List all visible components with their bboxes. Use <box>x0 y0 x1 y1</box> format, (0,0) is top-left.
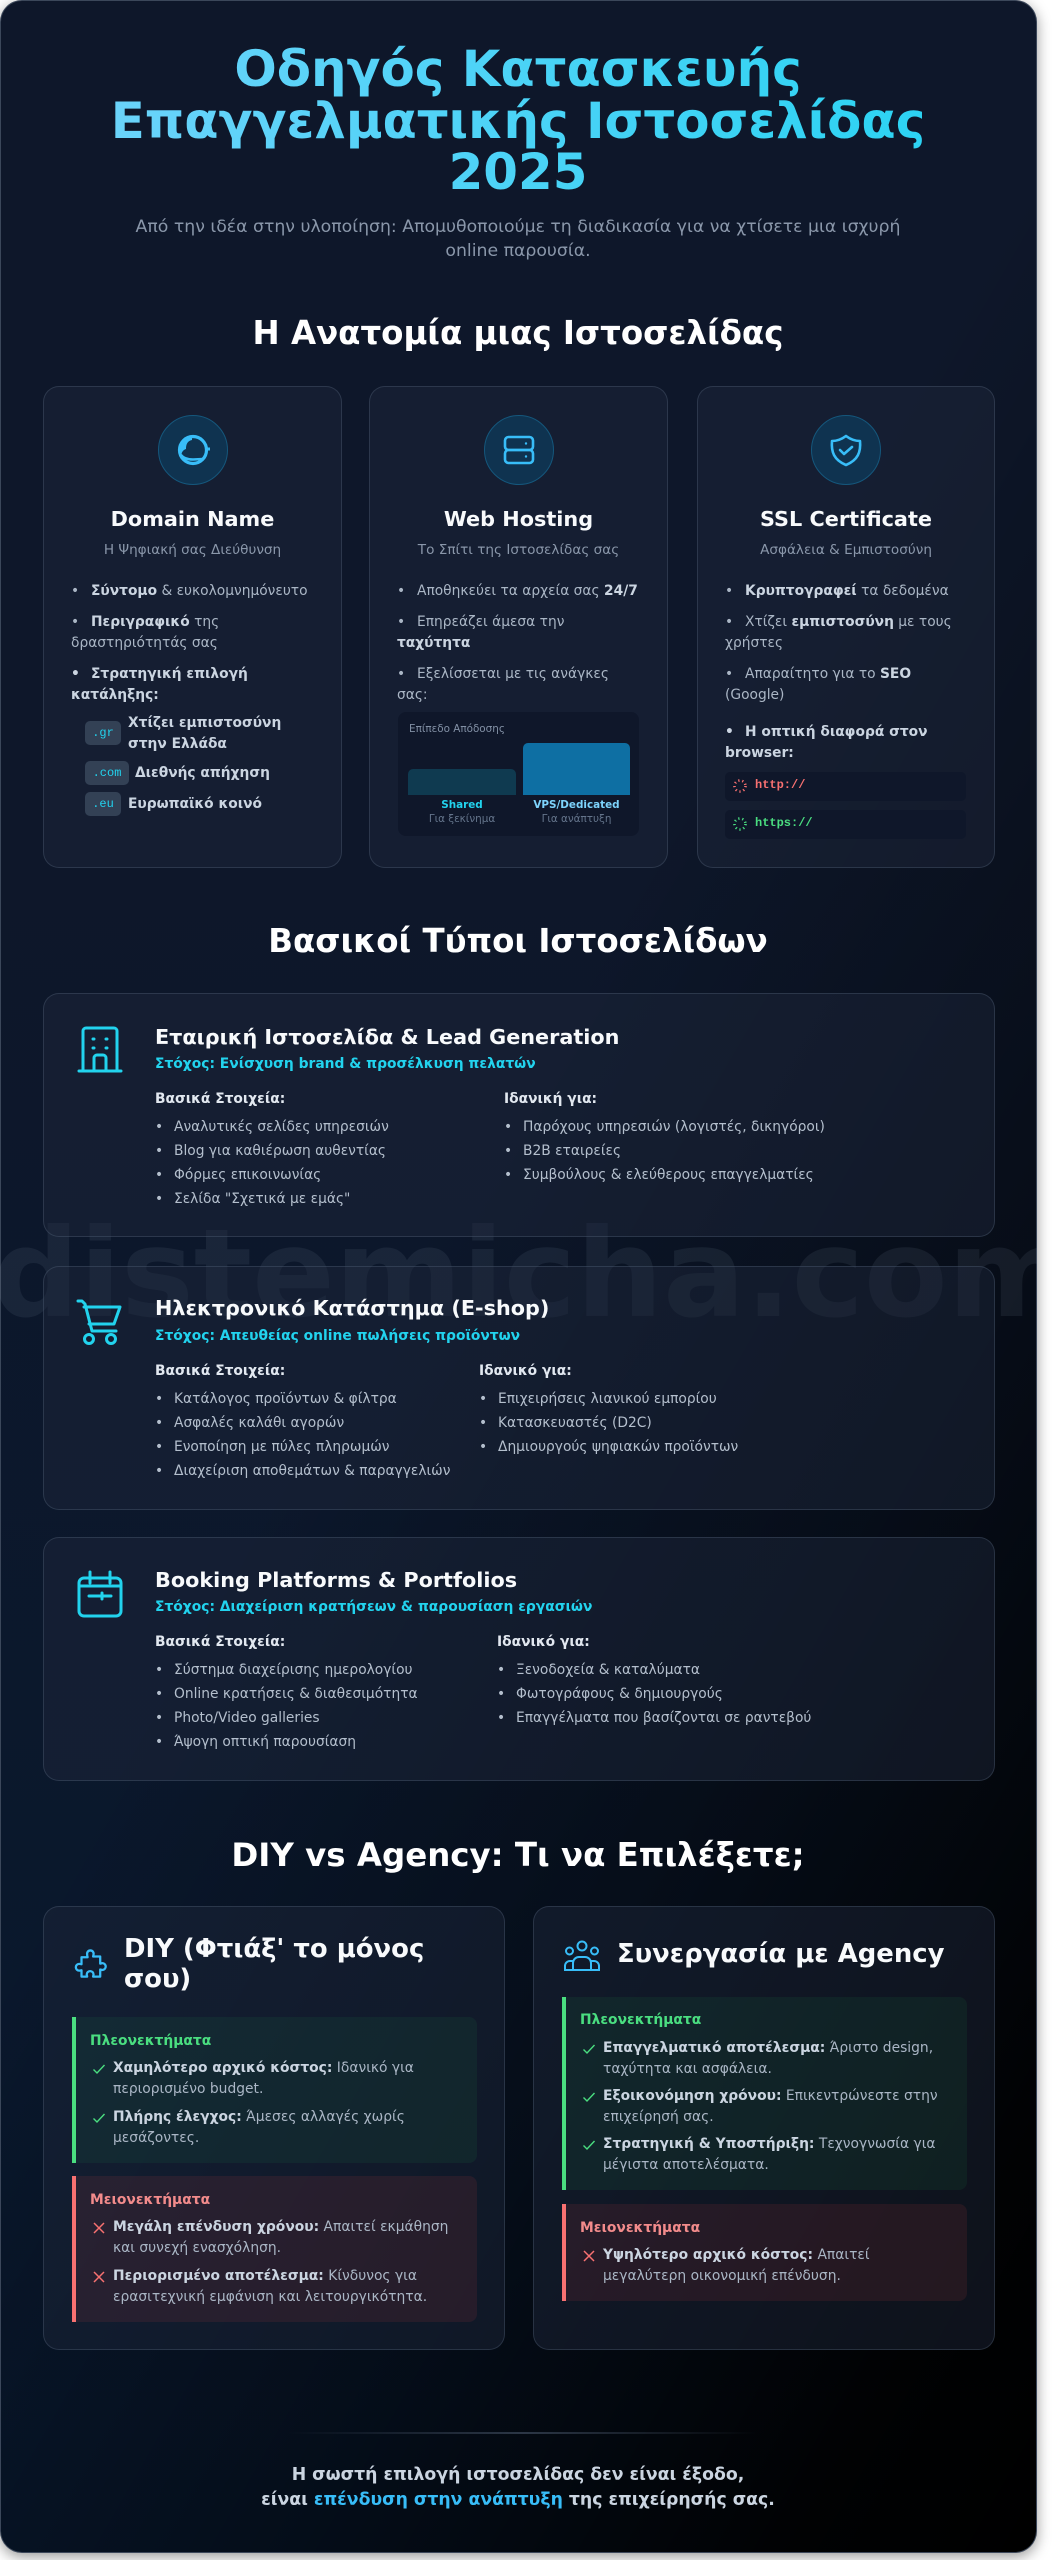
check icon <box>583 2140 595 2150</box>
column: ideal for: • <box>479 1391 487 1407</box>
type goal: Στόχος: Ενίσχυση brand & προσέλκυση πελατών <box>155 1056 536 1072</box>
list item: επιχείρησή σας. <box>603 2109 714 2125</box>
column: key elements: • <box>155 1119 163 1135</box>
card title: Web Hosting <box>444 507 593 531</box>
check icon <box>93 2064 105 2074</box>
column: ideal for: • <box>497 1662 505 1678</box>
column: ideal for: • <box>497 1710 505 1726</box>
list item: και συνεχή ενασχόληση. <box>113 2240 281 2256</box>
column: ideal for <box>479 1363 738 1455</box>
panel: advantages <box>72 2017 477 2163</box>
column: key elements <box>155 1634 418 1750</box>
list item <box>603 2088 938 2125</box>
check icon <box>583 2092 595 2102</box>
column: ideal for: Ξενοδοχεία & καταλύματα <box>516 1662 700 1678</box>
http row <box>725 772 966 801</box>
panel: ssl certificate: • <box>725 666 733 682</box>
column: ideal for: • <box>479 1415 487 1431</box>
list item: Επαγγελματικό αποτέλεσμα: Άριστο design, <box>603 2040 933 2056</box>
panel: domain name: Χτίζει εμπιστοσύνη <box>128 715 281 731</box>
column: ideal for: Παρόχους υπηρεσιών (λογιστές, δικηγόροι) <box>523 1119 825 1135</box>
list item: ερασιτεχνική εμφάνιση και λειτουργικότητα. <box>113 2289 427 2305</box>
icon: puzzle <box>74 1949 107 1978</box>
footer text: Η σωστή επιλογή ιστοσελίδας δεν είναι έξοδο, <box>292 2465 744 2485</box>
column title: σου) <box>124 1964 191 1994</box>
tld .gr <box>85 721 121 745</box>
label: Πλεονεκτήματα <box>90 2033 211 2049</box>
icon: users <box>564 1940 600 1971</box>
column: ideal for: Ιδανική για: <box>504 1091 597 1107</box>
heading: website types: Βασικοί Τύποι Ιστοσελίδων <box>268 922 768 960</box>
column: ideal for: Κατασκευαστές (D2C) <box>498 1415 652 1431</box>
cross icon <box>94 2222 104 2234</box>
type title: Booking Platforms & Portfolios <box>155 1568 517 1592</box>
panel: web hosting: σας: <box>397 687 428 703</box>
column: ideal for: • <box>504 1119 512 1135</box>
check icon <box>583 2044 595 2054</box>
title: Οδηγός Κατασκευής <box>234 40 802 98</box>
panel: domain name: Περιγραφικό της <box>91 614 219 630</box>
column: key elements: Online κρατήσεις & διαθεσιμότητα <box>174 1686 418 1702</box>
card subtitle: Η Ψηφιακή σας Διεύθυνση <box>104 542 281 558</box>
column: ideal for: Φωτογράφους & δημιουργούς <box>516 1686 723 1702</box>
panel: domain name: στην Ελλάδα <box>128 736 227 752</box>
column: key elements: • <box>155 1710 163 1726</box>
column: ideal for: Συμβούλους & ελεύθερους επαγγελματίες <box>523 1167 814 1183</box>
type goal: Στόχος: Διαχείριση κρατήσεων & παρουσίαση εργασιών <box>155 1599 592 1615</box>
list item: μεγαλύτερη οικονομική επένδυση. <box>603 2268 841 2284</box>
panel: domain name <box>43 386 342 868</box>
bullet list: Κρυπτογραφεί τα δεδομένα <box>745 583 949 599</box>
list item: Χαμηλότερο αρχικό κόστος: Ιδανικό για <box>113 2060 414 2076</box>
panel: agency <box>533 1906 995 2350</box>
panel: web hosting <box>369 386 668 868</box>
column: key elements: • <box>155 1686 163 1702</box>
column: key elements: Διαχείριση αποθεμάτων & παραγγελιών <box>174 1463 450 1479</box>
column: key elements: Φόρμες επικοινωνίας <box>174 1167 321 1183</box>
tld .eu <box>85 792 121 816</box>
column: ideal for <box>504 1091 825 1183</box>
list item <box>113 2109 405 2146</box>
tld .com <box>85 761 129 785</box>
column: ideal for: Ιδανικό για: <box>497 1634 590 1650</box>
column: key elements: • <box>155 1439 163 1455</box>
column title <box>124 1934 424 1994</box>
column: key elements: • <box>155 1143 163 1159</box>
label: Μειονεκτήματα <box>580 2220 700 2236</box>
https row <box>725 810 966 839</box>
panel: disadvantages <box>562 2204 967 2301</box>
list item: περιορισμένο budget. <box>113 2081 263 2097</box>
column: key elements: • <box>155 1734 163 1750</box>
subtitle <box>136 217 900 260</box>
column: ideal for: • <box>504 1143 512 1159</box>
https row: https:// <box>755 816 813 830</box>
panel: ssl certificate: browser: <box>725 745 794 761</box>
column: ideal for: B2B εταιρείες <box>523 1143 621 1159</box>
bullet list: • <box>725 583 733 599</box>
footer text <box>261 2465 775 2510</box>
panel: disadvantages <box>72 2176 477 2322</box>
column: key elements: Βασικά Στοιχεία: <box>155 1091 285 1107</box>
panel: ssl certificate <box>697 386 995 868</box>
column: key elements: • <box>155 1415 163 1431</box>
panel: web hosting: Επηρεάζει άμεσα την <box>417 614 564 630</box>
panel: ssl certificate: • <box>725 614 733 630</box>
tld .eu: .eu <box>92 797 114 811</box>
icon: calendar <box>78 1570 122 1618</box>
type title: Εταιρική Ιστοσελίδα & Lead Generation <box>155 1025 619 1049</box>
panel: web hosting: • <box>397 614 405 630</box>
panel: domain name: • <box>71 666 80 682</box>
column: key elements: • <box>155 1662 163 1678</box>
column: key elements <box>155 1091 389 1207</box>
panel: domain name: • <box>71 614 79 630</box>
column: key elements: Σύστημα διαχείρισης ημερολογίου <box>174 1662 412 1678</box>
column: key elements: • <box>155 1191 163 1207</box>
panel: domain name: Ευρωπαϊκό κοινό <box>128 796 262 812</box>
label: Πλεονεκτήματα <box>580 2012 701 2028</box>
column: key elements: • <box>155 1463 163 1479</box>
panel: web hosting: • <box>397 666 405 682</box>
column: ideal for <box>497 1634 811 1726</box>
column: key elements: Ενοποίηση με πύλες πληρωμών <box>174 1439 389 1455</box>
list item <box>603 2040 933 2077</box>
icon: cart <box>76 1300 122 1345</box>
bar label: vps: VPS/Dedicated <box>533 799 620 811</box>
column: ideal for: Επαγγέλματα που βασίζονται σε ραντεβού <box>516 1710 811 1726</box>
panel: ssl certificate: χρήστες <box>725 635 783 651</box>
http row: http:// <box>755 778 805 792</box>
label: Μειονεκτήματα <box>90 2192 210 2208</box>
icon: shield <box>811 415 881 485</box>
panel: web hosting: ταχύτητα <box>397 635 470 651</box>
tld .gr: .gr <box>92 726 114 740</box>
column: key elements: Κατάλογος προϊόντων & φίλτρα <box>174 1391 397 1407</box>
list item: Πλήρης έλεγχος: Άμεσες αλλαγές χωρίς <box>113 2109 405 2125</box>
bullet list: • <box>397 583 405 599</box>
list item <box>602 2247 870 2284</box>
panel: domain name: κατάληξης: <box>71 687 159 703</box>
list item: Υψηλότερο αρχικό κόστος: Απαιτεί <box>603 2247 870 2263</box>
panel: web hosting: Εξελίσσεται με τις ανάγκες <box>417 666 609 682</box>
column: ideal for: Δημιουργούς ψηφιακών προϊόντων <box>498 1439 738 1455</box>
column: key elements: Βασικά Στοιχεία: <box>155 1634 285 1650</box>
card title: SSL Certificate <box>760 507 932 531</box>
column: key elements: • <box>155 1391 163 1407</box>
panel: e-shop <box>43 1266 995 1510</box>
column: key elements: Blog για καθιέρωση αυθεντίας <box>174 1143 386 1159</box>
subtitle: online παρουσία. <box>445 240 591 260</box>
heading: anatomy: Η Ανατομία μιας Ιστοσελίδας <box>253 314 783 352</box>
column title: DIY (Φτιάξ' το μόνος <box>124 1934 424 1964</box>
icon: globe <box>158 415 228 485</box>
title: 2025 <box>449 143 587 201</box>
list item: μεσάζοντες. <box>113 2130 199 2146</box>
chart: performance level: Για ανάπτυξη <box>542 813 611 825</box>
panel: ssl certificate: Η οπτική διαφορά στον <box>745 724 928 740</box>
bar: shared <box>408 769 516 795</box>
column: key elements <box>155 1363 450 1479</box>
bullet list: Αποθηκεύει τα αρχεία σας 24/7 <box>417 583 638 599</box>
heading: diy vs agency: DIY vs Agency: Τι να Επιλέξετε; <box>231 1836 805 1874</box>
panel: ssl certificate: • <box>725 724 734 740</box>
column: ideal for: • <box>479 1439 487 1455</box>
bar label: shared: Shared <box>441 799 483 811</box>
footer text: είναι επένδυση στην ανάπτυξη της επιχείρησής σας. <box>261 2490 775 2510</box>
bar: vps <box>523 743 630 795</box>
list item: μέγιστα αποτελέσματα. <box>603 2157 769 2173</box>
column: key elements: Σελίδα "Σχετικά με εμάς" <box>174 1191 350 1207</box>
column: key elements: Ασφαλές καλάθι αγορών <box>174 1415 344 1431</box>
column: key elements: • <box>155 1167 163 1183</box>
column: ideal for: • <box>504 1167 512 1183</box>
column title: Συνεργασία με Agency <box>617 1939 944 1969</box>
panel: domain name: Διεθνής απήχηση <box>135 765 270 781</box>
card title: Domain Name <box>111 507 274 531</box>
type title: Ηλεκτρονικό Κατάστημα (E-shop) <box>155 1296 549 1320</box>
column: key elements: Άψογη οπτική παρουσίαση <box>174 1734 356 1750</box>
panel: advantages <box>562 1997 967 2190</box>
card subtitle: Το Σπίτι της Ιστοσελίδας σας <box>418 542 619 558</box>
column: key elements: Photo/Video galleries <box>174 1710 320 1726</box>
cross icon <box>94 2272 104 2282</box>
chart: performance level: Για ξεκίνημα <box>429 813 495 825</box>
bullet list: Σύντομο & ευκολομνημόνευτο <box>91 583 308 599</box>
tld .com: .com <box>93 766 121 780</box>
type goal: Στόχος: Απευθείας online πωλήσεις προϊόντων <box>155 1328 520 1344</box>
column: ideal for: Επιχειρήσεις λιανικού εμπορίου <box>498 1391 717 1407</box>
list item: Περιορισμένο αποτέλεσμα: Κίνδυνος για <box>113 2268 417 2284</box>
list item <box>603 2136 936 2173</box>
list item: ταχύτητα και ασφάλεια. <box>603 2061 772 2077</box>
bullet list: • <box>71 583 79 599</box>
column: key elements: Βασικά Στοιχεία: <box>155 1363 285 1379</box>
list item: Στρατηγική & Υποστήριξη: Τεχνογνωσία για <box>603 2136 936 2152</box>
card subtitle: Ασφάλεια & Εμπιστοσύνη <box>760 542 932 558</box>
panel: booking platforms <box>43 1537 995 1781</box>
panel: ssl certificate: (Google) <box>725 687 784 703</box>
panel: ssl certificate: Απαραίτητο για το SEO <box>745 666 911 682</box>
chart label: Επίπεδο Απόδοσης <box>409 723 505 735</box>
list item: Εξοικονόμηση χρόνου: Επικεντρώνεστε στην <box>603 2088 938 2104</box>
panel: ssl certificate: Χτίζει εμπιστοσύνη με τους <box>745 614 952 630</box>
list item <box>113 2219 448 2256</box>
subtitle: Από την ιδέα στην υλοποίηση: Απομυθοποιούμε τη διαδικασία για να χτίσετε μια ισχυρή <box>136 217 900 237</box>
column: ideal for: • <box>497 1686 505 1702</box>
column: key elements: Αναλυτικές σελίδες υπηρεσιών <box>174 1119 389 1135</box>
list item <box>113 2268 427 2305</box>
list item <box>113 2060 414 2097</box>
check icon <box>93 2114 105 2123</box>
chart: performance level <box>398 712 639 836</box>
panel: domain name: Στρατηγική επιλογή <box>91 666 248 682</box>
icon: server <box>484 415 554 485</box>
list item: Μεγάλη επένδυση χρόνου: Απαιτεί εκμάθηση <box>113 2219 448 2235</box>
title <box>43 44 993 198</box>
divider <box>288 2432 758 2434</box>
title: Επαγγελματικής Ιστοσελίδας <box>111 92 925 150</box>
panel: domain name: δραστηριότητάς σας <box>71 635 218 651</box>
panel: diy <box>43 1906 505 2350</box>
cross icon <box>584 2250 594 2262</box>
column: ideal for: Ιδανικό για: <box>479 1363 572 1379</box>
panel: corporate website <box>43 993 995 1237</box>
icon: building <box>78 1026 122 1072</box>
